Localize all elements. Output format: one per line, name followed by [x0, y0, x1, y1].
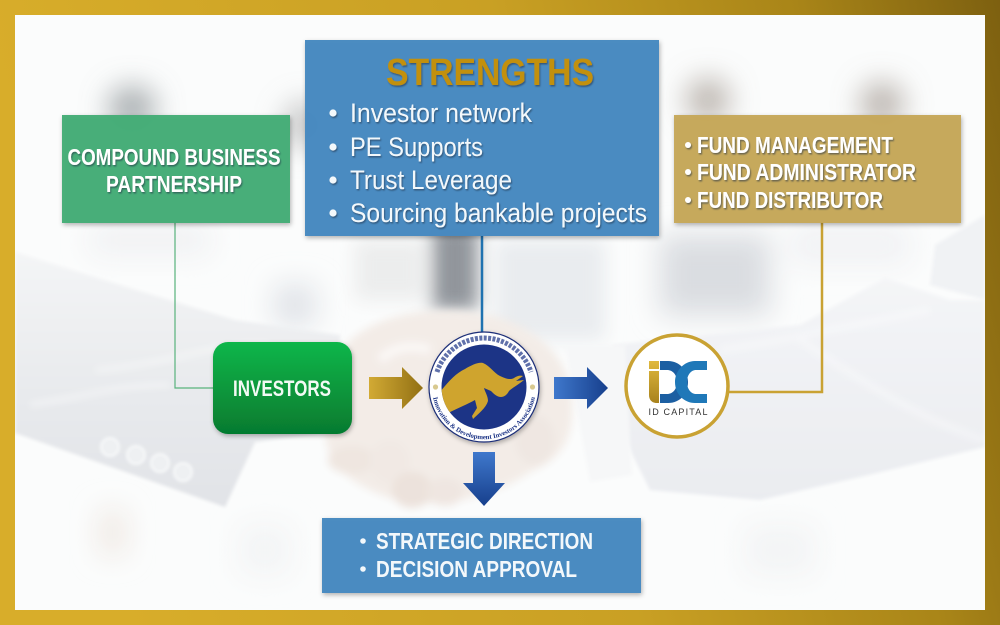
right jacket sleeve [626, 302, 984, 500]
sleeve buttons [101, 438, 192, 481]
panel: fund roles [674, 115, 961, 223]
letters D and C [660, 361, 688, 403]
strengths list [329, 98, 647, 228]
panel: strategic direction [322, 518, 641, 593]
logo ornaments [433, 384, 535, 390]
decisions list [360, 528, 593, 582]
bull [438, 363, 524, 419]
sleeve folds [30, 310, 985, 440]
strengths list: Investor network [350, 98, 532, 128]
icon: association logo [426, 330, 544, 448]
partnership label [68, 144, 280, 197]
panel: compound business partnership [62, 115, 290, 223]
left jacket sleeve [15, 252, 345, 507]
fund roles list [685, 132, 916, 213]
strengths list: Trust Leverage [350, 165, 512, 195]
arrow: association down to decisions [463, 452, 505, 506]
panel: strengths [305, 40, 659, 236]
partnership label: PARTNERSHIP [106, 171, 242, 197]
decisions list: STRATEGIC DIRECTION [376, 528, 593, 554]
partnership label: COMPOUND BUSINESS [68, 144, 280, 170]
investors button: INVESTORS [233, 376, 331, 401]
decisions list: DECISION APPROVAL [376, 556, 577, 582]
fund roles list: FUND DISTRIBUTOR [697, 187, 883, 213]
icon: ID Capital logo [626, 335, 728, 437]
letter I [649, 361, 659, 403]
connector: fund box to ID Capital [728, 222, 822, 392]
logo ornament band [437, 338, 531, 372]
strengths list: PE Supports [350, 132, 483, 162]
association name around logo: Innovation & Development Investors Association [433, 396, 535, 440]
ID Capital label: ID CAPITAL [648, 407, 708, 417]
fund roles list: FUND MANAGEMENT [697, 132, 894, 158]
strengths list: Sourcing bankable projects [350, 198, 647, 228]
arrow: investors to association [369, 367, 423, 409]
investors button [213, 342, 352, 434]
hands [325, 310, 572, 508]
fund roles list: FUND ADMINISTRATOR [697, 159, 916, 185]
strengths heading: STRENGTHS [386, 52, 594, 94]
connector: partnership to investors [175, 222, 214, 388]
arrow: association to ID Capital [554, 367, 608, 409]
connector: strengths to association logo [481, 236, 483, 335]
shirt cuff [626, 427, 628, 440]
